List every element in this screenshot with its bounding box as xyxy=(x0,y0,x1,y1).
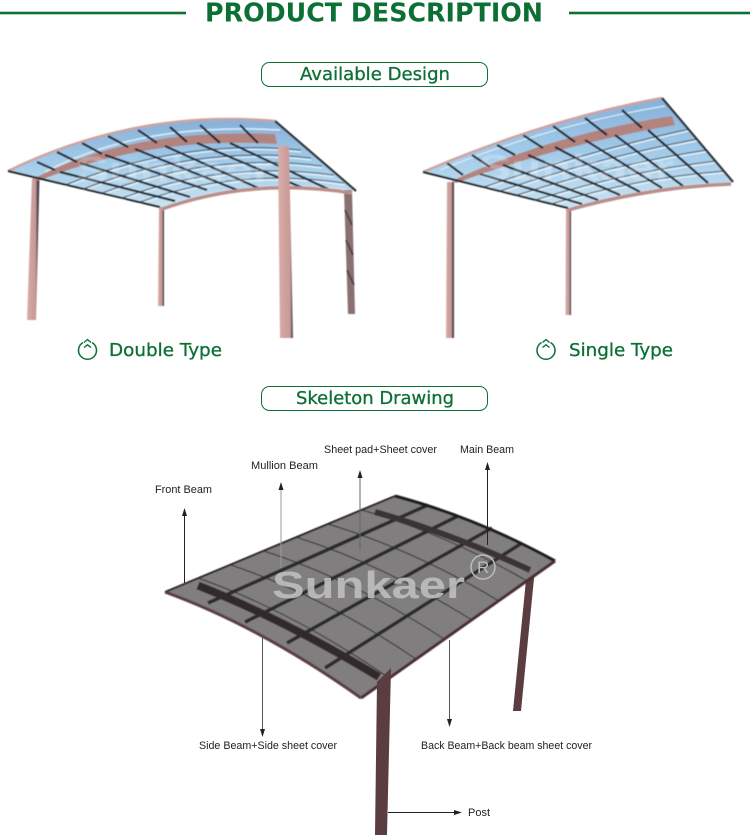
label: main beam: Main Beam xyxy=(460,444,514,456)
label: sheet pad and sheet cover: Sheet pad+Sheet cover xyxy=(324,444,437,456)
watermark: Sunkaer xyxy=(272,565,465,607)
label: front beam: Front Beam xyxy=(155,484,212,496)
illustration: double type carport xyxy=(8,119,356,338)
diagram: skeleton drawing xyxy=(165,496,555,835)
watermark registered mark: R xyxy=(477,558,489,577)
roof panels xyxy=(423,98,733,210)
label: side beam and side sheet cover xyxy=(199,636,337,752)
label: mullion beam: Mullion Beam xyxy=(251,460,318,472)
back posts xyxy=(27,178,355,320)
illustration: single type carport xyxy=(423,98,733,338)
roof panels xyxy=(8,119,356,209)
front post xyxy=(278,146,293,338)
label: main beam xyxy=(460,444,514,545)
caption: single type: Single Type xyxy=(569,340,673,361)
label: sheet pad and sheet cover xyxy=(324,444,437,550)
label: front beam xyxy=(155,484,212,583)
label: mullion beam xyxy=(251,460,318,568)
caption: double type: Double Type xyxy=(109,340,222,361)
heading pill: available design: Available Design xyxy=(300,64,450,85)
label: back beam and back beam sheet cover xyxy=(421,640,592,752)
label: post xyxy=(388,807,490,819)
watermark registered mark xyxy=(471,555,495,579)
back post xyxy=(513,568,535,711)
label: post: Post xyxy=(468,807,490,819)
front post xyxy=(375,668,391,835)
roof panels xyxy=(165,496,555,698)
watermark: Sunkaer xyxy=(478,147,674,188)
heading pill: skeleton drawing: Skeleton Drawing xyxy=(296,388,454,409)
heading pill: available design xyxy=(262,62,488,86)
label: side beam and side sheet cover: Side Beam+Side sheet cover xyxy=(199,740,337,752)
posts xyxy=(446,182,571,338)
heading pill: skeleton drawing xyxy=(262,386,488,410)
label: back beam and back beam sheet cover: Back Beam+Back beam sheet cover xyxy=(421,740,592,752)
watermark: Sunkaer xyxy=(76,149,272,190)
